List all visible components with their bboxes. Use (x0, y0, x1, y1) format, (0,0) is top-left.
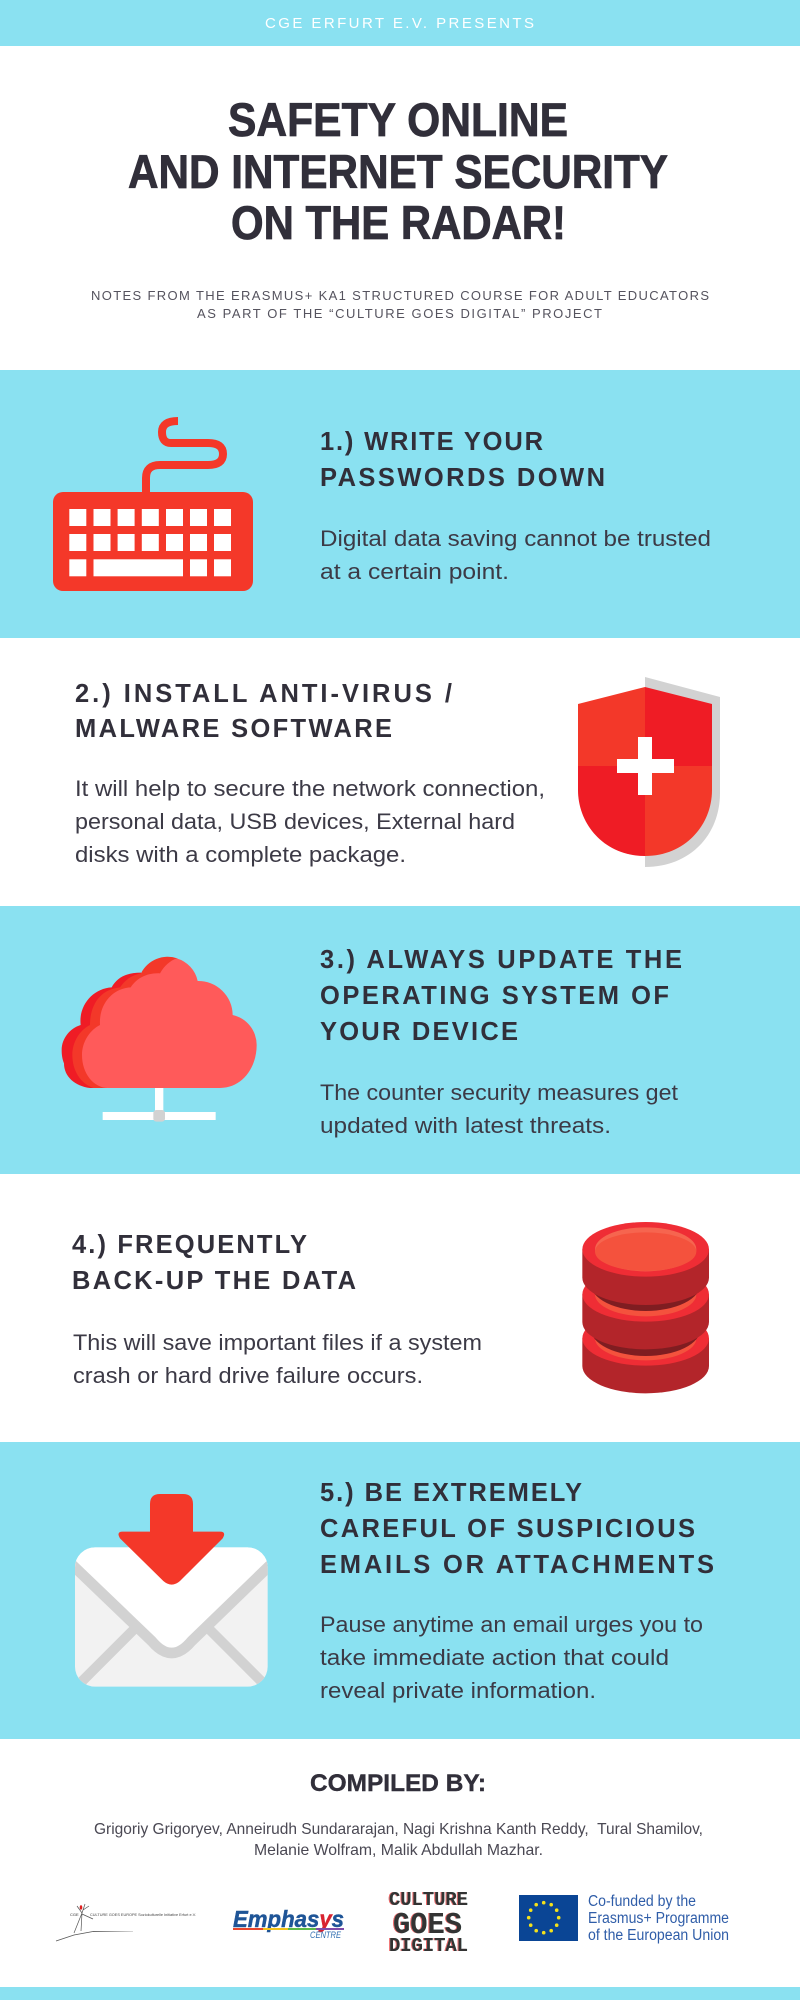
panel: tip 4 back-up (0, 1174, 800, 1442)
heading: tip 1: 1.) WRITE YOUR (320, 428, 543, 456)
text: tip 2: personal data, USB devices, External hard (75, 809, 515, 834)
text: tip 1: at a certain point. (320, 559, 509, 584)
logo: Culture Goes Digital: DIGITAL (389, 1935, 468, 1957)
text: tip 4 (73, 1330, 482, 1388)
heading: tip 4: 4.) FREQUENTLY (72, 1231, 307, 1259)
logo: CGE Culture Goes Europe (56, 1904, 196, 1941)
text: tip 5 (320, 1612, 703, 1703)
text: tip 5: reveal private information. (320, 1678, 596, 1703)
text: tip 5: Pause anytime an email urges you to (320, 1612, 703, 1637)
title: ON THE RADAR! (231, 197, 566, 250)
logo: Emphasys Centre: CENTRE (310, 1930, 342, 1941)
text: tip 2: disks with a complete package. (75, 842, 406, 867)
text: tip 4: This will save important files if a system (73, 1330, 482, 1355)
icon: shield (578, 677, 720, 867)
logo: EU co-funded: of the European Union (588, 1927, 729, 1944)
logo: EU co-funded: Co-funded by the (588, 1893, 696, 1910)
heading: tip 1: PASSWORDS DOWN (320, 464, 605, 492)
panel: tip 5 emails (0, 1442, 800, 1739)
heading: tip 5: 5.) BE EXTREMELY (320, 1479, 582, 1507)
icon: database (582, 1222, 709, 1393)
heading: tip 3: YOUR DEVICE (320, 1018, 518, 1046)
logo: CGE Culture Goes Europe: CULTURE GOES EUROPE Soziokulturelle Initiative Erfurt e.V. (90, 1912, 196, 1917)
panel: tip 3 updates (0, 906, 800, 1174)
subtitle (91, 288, 709, 321)
text: tip 1: Digital data saving cannot be trusted (320, 526, 711, 551)
logo: EU co-funded: Erasmus+ Programme (588, 1910, 729, 1927)
heading: tip 4: BACK-UP THE DATA (72, 1267, 356, 1295)
subtitle: AS PART OF THE “CULTURE GOES DIGITAL” PROJECT (197, 306, 602, 321)
logo: Culture Goes Digital (389, 1889, 468, 1957)
icon: keyboard (53, 421, 253, 591)
panel: tip 2 anti-virus (0, 638, 800, 906)
heading: tip 5: CAREFUL OF SUSPICIOUS (320, 1515, 695, 1543)
text: tip 2: It will help to secure the network connection, (75, 776, 545, 801)
text: tip 3: The counter security measures get (320, 1080, 679, 1105)
text: contributors: Grigoriy Grigoryev, Anneirudh Sundararajan, Nagi Krishna Kanth Reddy, Tural Shamilov, (94, 1821, 703, 1838)
heading: tip 3 (320, 946, 682, 1046)
logo: Culture Goes Digital: CULTURE (389, 1889, 468, 1911)
text: contributors: Melanie Wolfram, Malik Abdullah Mazhar. (254, 1842, 543, 1859)
panel: tip 1 passwords (0, 370, 800, 638)
logo: EU co-funded (519, 1893, 729, 1944)
subtitle: NOTES FROM THE ERASMUS+ KA1 STRUCTURED COURSE FOR ADULT EDUCATORS (91, 288, 709, 303)
title: SAFETY ONLINE (228, 94, 568, 147)
heading: tip 1 (320, 428, 605, 492)
heading: tip 2 (75, 680, 452, 743)
heading: tip 2: MALWARE SOFTWARE (75, 715, 392, 743)
text: tip 4: crash or hard drive failure occurs. (73, 1363, 423, 1388)
heading: compiled by: COMPILED BY: (310, 1770, 486, 1797)
text: tip 1 (320, 526, 711, 584)
heading: tip 3: OPERATING SYSTEM OF (320, 982, 669, 1010)
top banner (0, 0, 800, 46)
text: contributors (94, 1821, 703, 1859)
top banner: CGE ERFURT E.V. PRESENTS (265, 15, 534, 32)
heading: tip 5 (320, 1479, 714, 1579)
icon: envelope with arrow (70, 1494, 273, 1687)
logo: Emphasys Centre: Emphasys (233, 1906, 344, 1932)
icon: cloud network (62, 957, 257, 1122)
heading: tip 5: EMAILS OR ATTACHMENTS (320, 1551, 714, 1579)
footer band (0, 1987, 800, 2000)
heading: tip 3: 3.) ALWAYS UPDATE THE (320, 946, 682, 974)
heading: tip 2: 2.) INSTALL ANTI-VIRUS / (75, 680, 452, 708)
text: tip 2 (75, 776, 545, 867)
text: tip 5: take immediate action that could (320, 1645, 669, 1670)
title (128, 94, 668, 250)
text: tip 3 (320, 1080, 679, 1138)
title: AND INTERNET SECURITY (128, 146, 668, 199)
logo: Culture Goes Digital: GOES (393, 1908, 462, 1943)
heading: tip 4 (72, 1231, 356, 1295)
logo: CGE Culture Goes Europe: CGE (70, 1912, 79, 1917)
text: tip 3: updated with latest threats. (320, 1113, 611, 1138)
